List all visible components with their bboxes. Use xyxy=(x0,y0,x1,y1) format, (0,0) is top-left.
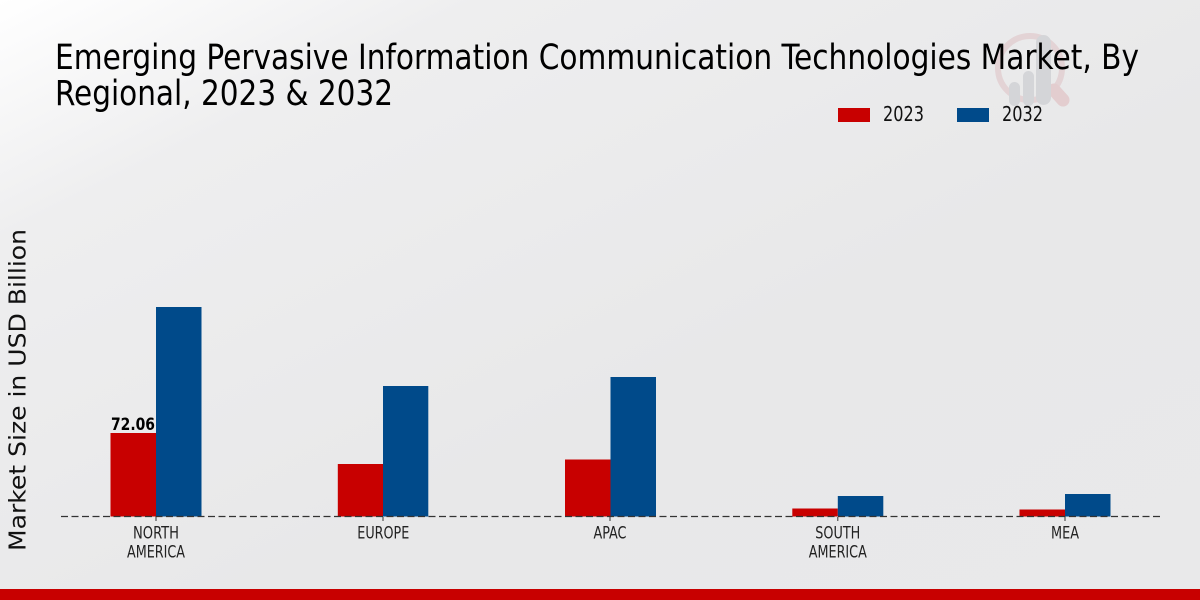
title: Emerging Pervasive Information Communication Technologies Market, By xyxy=(55,38,1139,78)
legend xyxy=(838,102,1043,126)
x-axis labels: AMERICA xyxy=(809,542,868,562)
x-axis labels: EUROPE xyxy=(357,524,409,542)
icon: watermark logo xyxy=(998,35,1063,106)
legend: 2032 xyxy=(1002,102,1043,126)
y-axis label: Market Size in USD Billion xyxy=(6,229,32,551)
bars: South America xyxy=(792,496,883,516)
bars: Europe xyxy=(338,386,428,516)
title: Regional, 2023 & 2032 xyxy=(55,74,393,114)
legend: 2023 xyxy=(883,102,924,126)
x-axis labels: SOUTH xyxy=(815,524,860,542)
value label: 72.06: 72.06 xyxy=(111,415,155,435)
bar chart xyxy=(61,307,1160,562)
x-axis labels: NORTH xyxy=(133,524,179,542)
title xyxy=(55,38,1139,114)
bars: APAC xyxy=(565,377,656,516)
x-axis labels xyxy=(127,524,1080,562)
bars: MEA xyxy=(1020,494,1110,516)
x-axis labels: APAC xyxy=(594,524,626,542)
bars: North America xyxy=(110,307,202,516)
x-axis baseline xyxy=(61,516,1160,518)
x-axis labels: MEA xyxy=(1051,524,1080,542)
x-axis labels: AMERICA xyxy=(127,542,186,562)
footer bar xyxy=(0,589,1200,600)
